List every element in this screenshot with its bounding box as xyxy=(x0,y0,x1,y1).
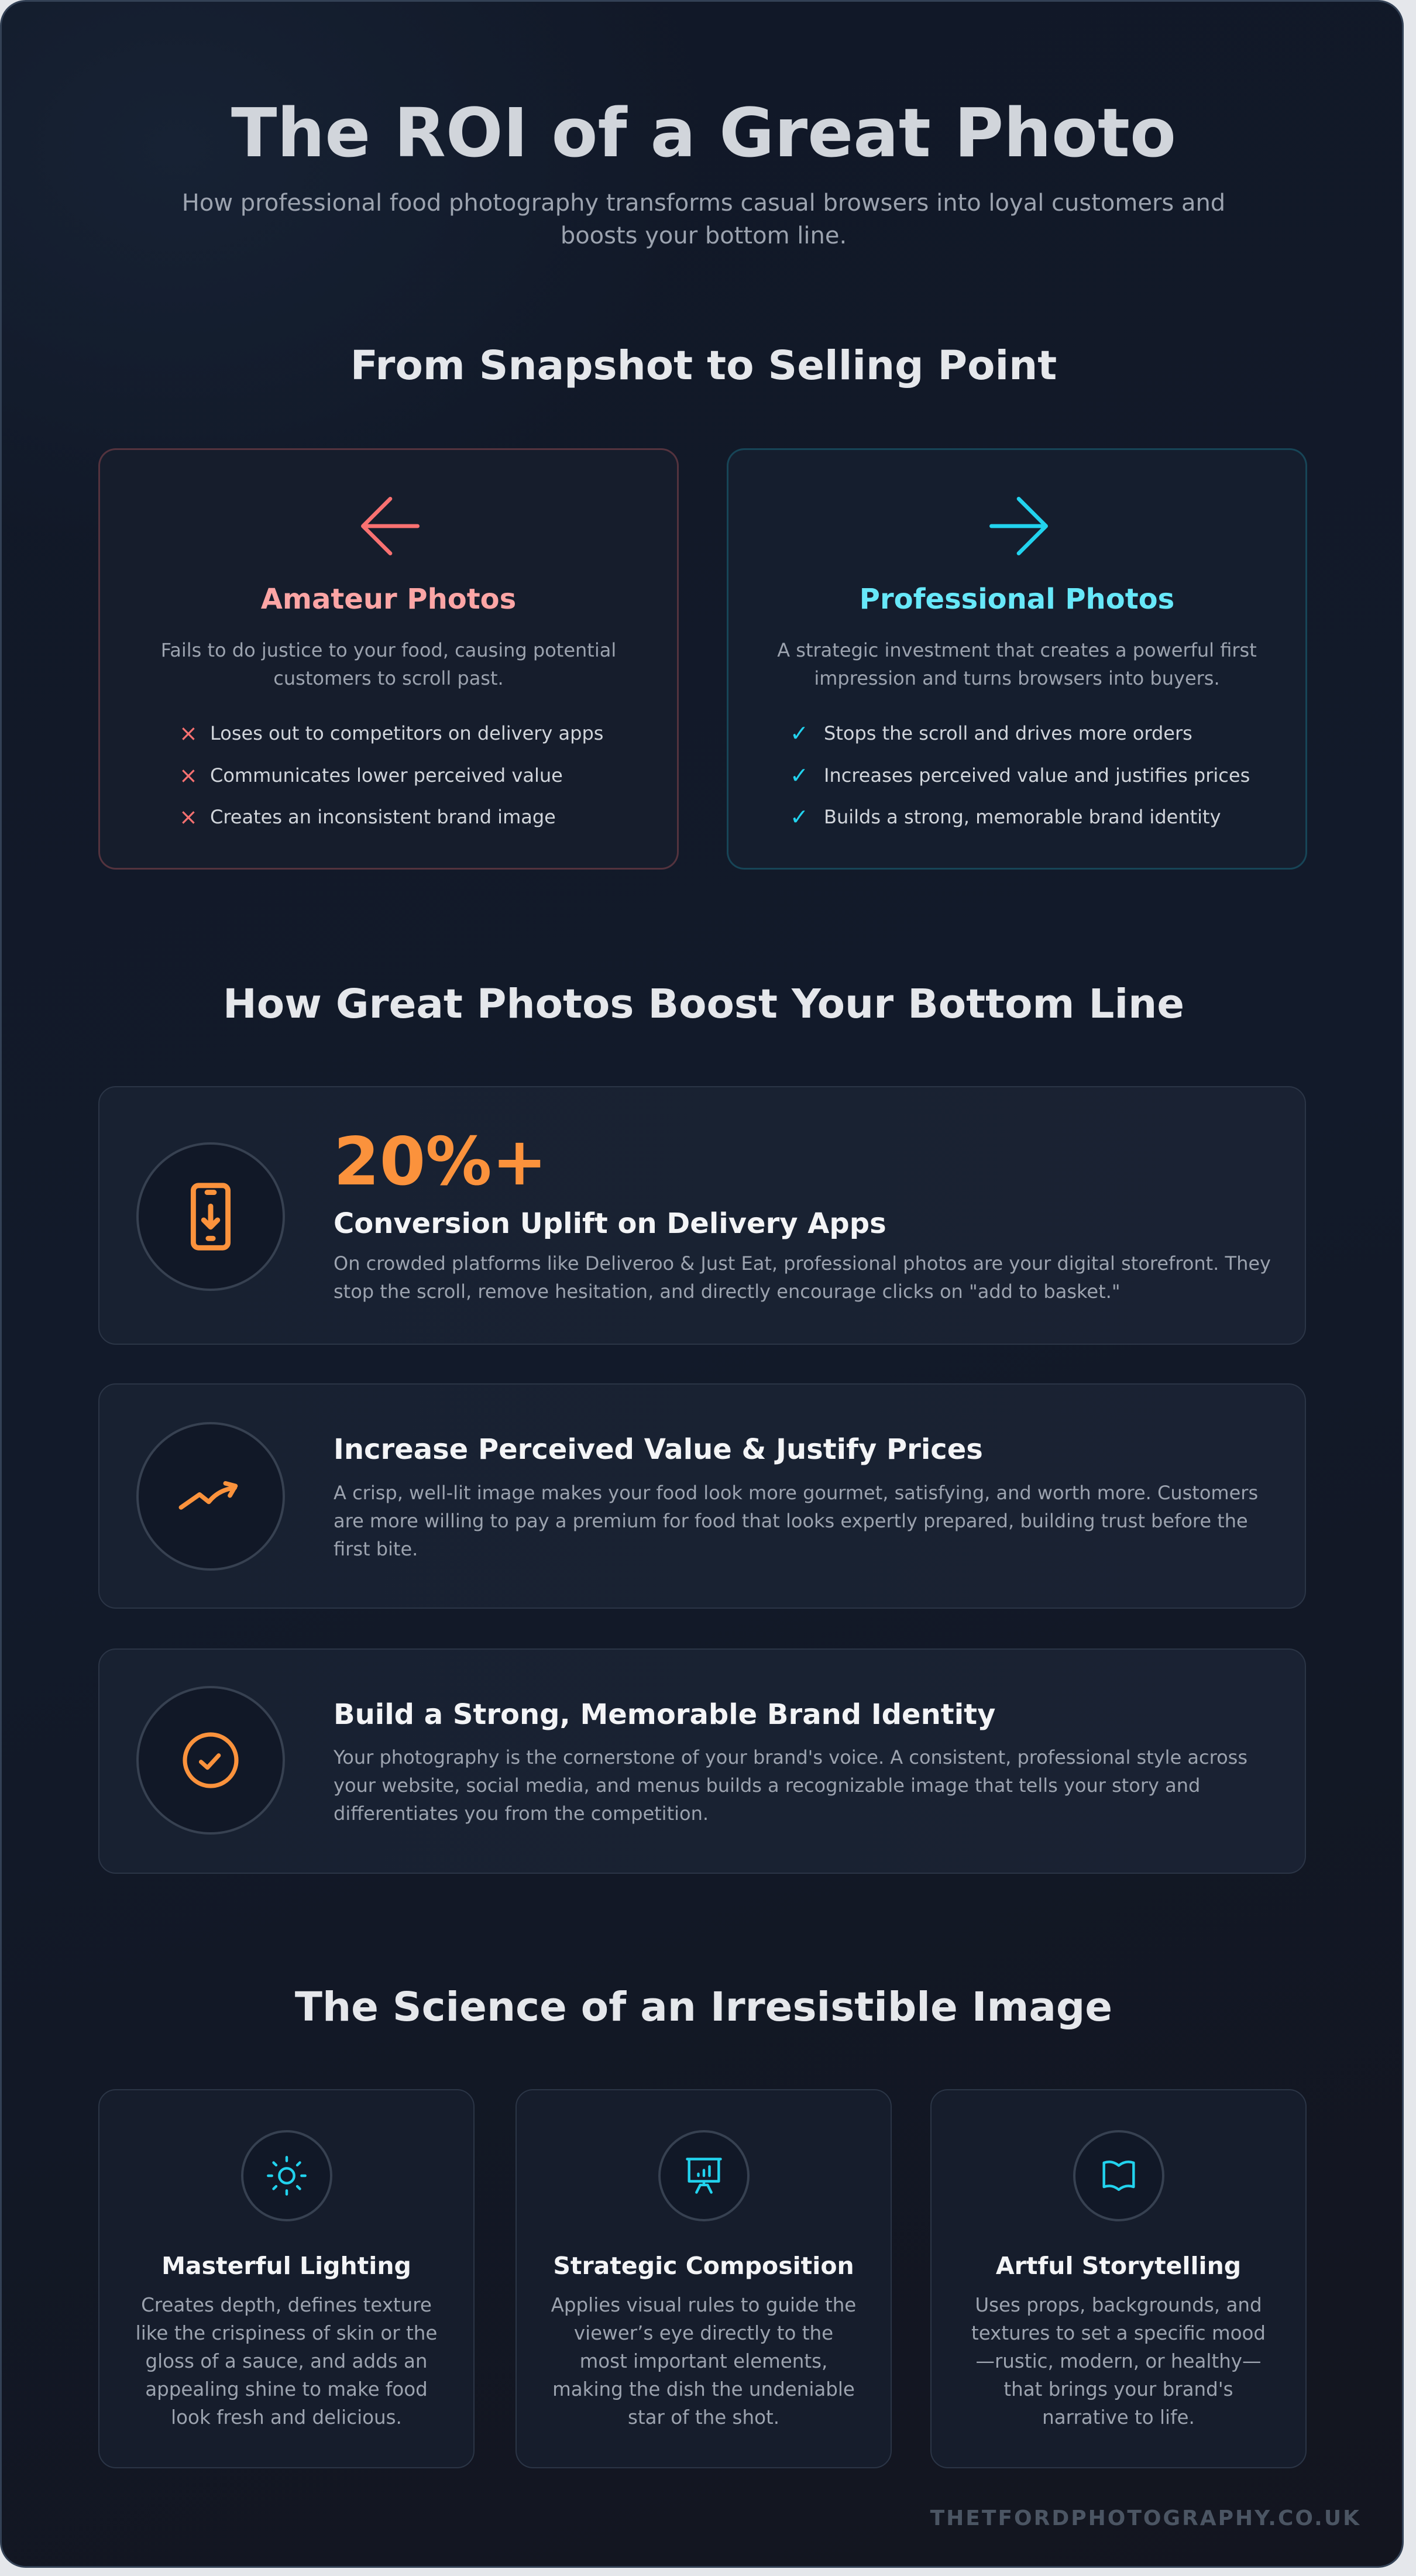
card description: Your photography is the cornerstone of your brand's voice. A consistent, professional style across xyxy=(334,1746,1247,1768)
card title: Conversion Uplift on Delivery Apps xyxy=(334,1207,886,1240)
description: look fresh and delicious. xyxy=(171,2406,402,2429)
description: viewer’s eye directly to the xyxy=(574,2322,833,2344)
professional title: Professional Photos xyxy=(860,583,1174,616)
description: star of the shot. xyxy=(628,2406,779,2429)
card description xyxy=(334,1252,1271,1303)
card description: stop the scroll, remove hesitation, and directly encourage clicks on "add to basket." xyxy=(334,1280,1121,1303)
heading: bottom line: How Great Photos Boost Your Bottom Line xyxy=(223,981,1184,1028)
card title: Increase Perceived Value & Justify Prices xyxy=(334,1433,983,1466)
card title: Build a Strong, Memorable Brand Identity xyxy=(334,1698,995,1731)
description: that brings your brand's xyxy=(1003,2378,1233,2400)
professional description: A strategic investment that creates a powerful first xyxy=(777,639,1257,661)
amateur list: × xyxy=(179,804,198,830)
icon: sun xyxy=(241,2130,332,2221)
amateur list: Communicates lower perceived value xyxy=(210,764,563,786)
amateur list: Creates an inconsistent brand image xyxy=(210,806,556,828)
icon: check circle xyxy=(136,1686,285,1835)
professional list: ✓ xyxy=(790,804,809,830)
amateur title: Amateur Photos xyxy=(261,583,516,616)
description: —rustic, modern, or healthy— xyxy=(975,2350,1262,2372)
panel: professional photos xyxy=(727,448,1307,870)
professional list: ✓ xyxy=(790,763,809,788)
amateur description xyxy=(161,639,616,689)
card: masterful lighting xyxy=(98,2089,475,2468)
amateur description: customers to scroll past. xyxy=(273,667,504,689)
description xyxy=(136,2294,437,2429)
title: The ROI of a Great Photo xyxy=(231,94,1176,173)
card description: On crowded platforms like Deliveroo & Just Eat, professional photos are your digital storefront. They xyxy=(334,1252,1271,1275)
card: brand identity xyxy=(98,1648,1306,1874)
card description: A crisp, well-lit image makes your food look more gourmet, satisfying, and worth more. Customers xyxy=(334,1482,1258,1504)
professional list xyxy=(790,720,1250,830)
card description xyxy=(334,1482,1258,1560)
title: Masterful Lighting xyxy=(161,2252,411,2280)
stat 20%+: 20%+ xyxy=(334,1123,547,1200)
description: narrative to life. xyxy=(1042,2406,1195,2429)
description: textures to set a specific mood xyxy=(971,2322,1266,2344)
subtitle: boosts your bottom line. xyxy=(561,222,847,249)
description: Creates depth, defines texture xyxy=(141,2294,432,2316)
amateur list: × xyxy=(179,720,198,746)
panel: amateur photos xyxy=(98,448,679,870)
icon: book xyxy=(1073,2130,1164,2221)
amateur list: Loses out to competitors on delivery apps xyxy=(210,722,603,744)
description: gloss of a sauce, and adds an xyxy=(145,2350,428,2372)
description xyxy=(551,2294,856,2429)
icon: left arrow xyxy=(361,497,420,555)
professional description xyxy=(777,639,1257,689)
amateur description: Fails to do justice to your food, causing potential xyxy=(161,639,616,661)
professional list: ✓ xyxy=(790,720,809,746)
icon: right arrow xyxy=(989,497,1048,555)
description: making the dish the undeniable xyxy=(552,2378,855,2400)
icon: trending up xyxy=(136,1422,285,1571)
card description: differentiates you from the competition. xyxy=(334,1802,709,1825)
subtitle: How professional food photography transforms casual browsers into loyal customers and xyxy=(182,190,1225,217)
description: most important elements, xyxy=(580,2350,827,2372)
card: strategic composition xyxy=(515,2089,892,2468)
icon: phone download xyxy=(136,1142,285,1291)
description: Applies visual rules to guide the xyxy=(551,2294,856,2316)
title: Strategic Composition xyxy=(553,2252,854,2280)
heading: from snapshot to selling point: From Snapshot to Selling Point xyxy=(350,342,1057,389)
description: Uses props, backgrounds, and xyxy=(975,2294,1262,2316)
heading: science: The Science of an Irresistible Image xyxy=(295,1984,1112,2031)
footer url: THETFORDPHOTOGRAPHY.CO.UK xyxy=(930,2506,1361,2530)
professional list: Stops the scroll and drives more orders xyxy=(824,722,1192,744)
professional description: impression and turns browsers into buyers. xyxy=(814,667,1220,689)
professional list: Increases perceived value and justifies prices xyxy=(824,764,1250,786)
subtitle xyxy=(182,190,1225,249)
title: Artful Storytelling xyxy=(996,2252,1241,2280)
amateur list xyxy=(179,720,603,830)
card: conversion uplift xyxy=(98,1086,1306,1345)
card description: are more willing to pay a premium for food that looks expertly prepared, building trust before the xyxy=(334,1510,1248,1532)
description xyxy=(971,2294,1266,2429)
card description: your website, social media, and menus builds a recognizable image that tells your story and xyxy=(334,1774,1200,1797)
icon: presentation chart xyxy=(658,2130,750,2221)
description: like the crispiness of skin or the xyxy=(136,2322,437,2344)
card description: first bite. xyxy=(334,1538,418,1560)
card: artful storytelling xyxy=(930,2089,1307,2468)
description: appealing shine to make food xyxy=(145,2378,428,2400)
card description xyxy=(334,1746,1247,1825)
card: perceived value xyxy=(98,1383,1306,1609)
professional list: Builds a strong, memorable brand identity xyxy=(824,806,1221,828)
amateur list: × xyxy=(179,763,198,788)
